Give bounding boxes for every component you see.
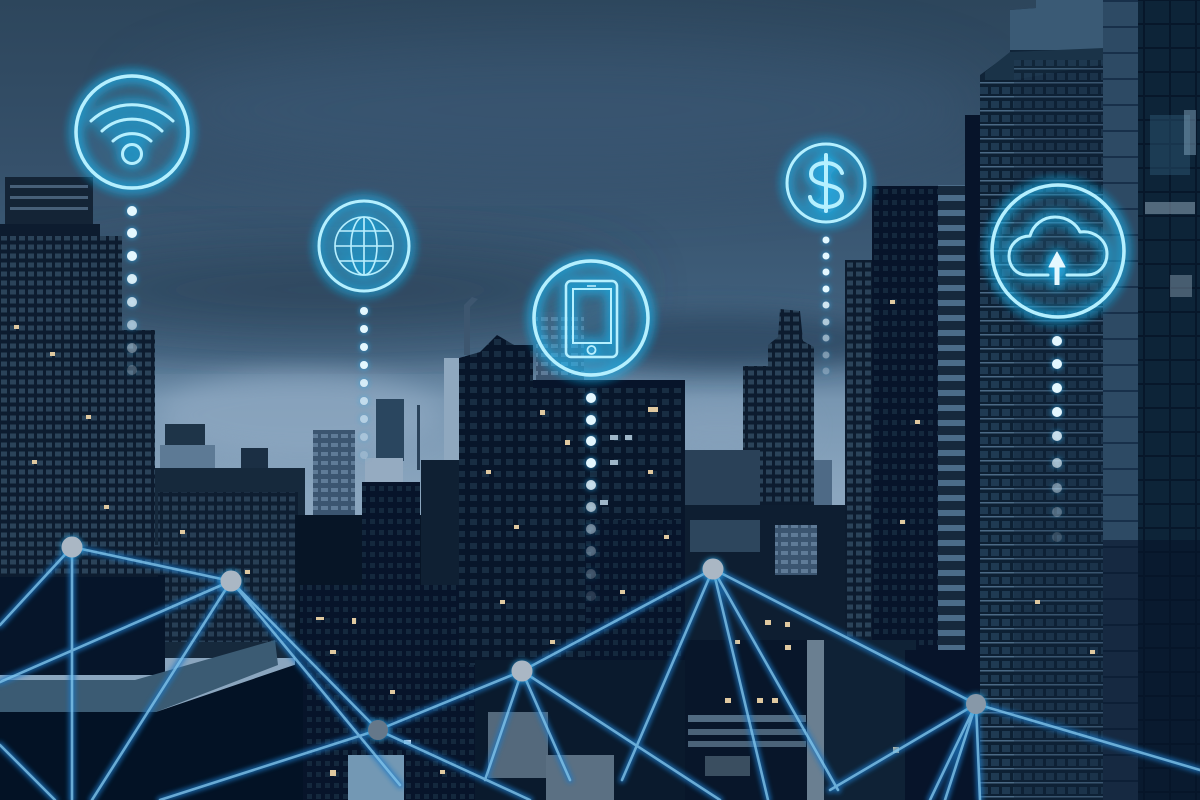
dotted connector: phone — [586, 393, 596, 601]
right towers — [845, 0, 1200, 800]
lit windows — [14, 300, 1095, 776]
foreground rooftops — [0, 545, 980, 800]
mid-rise blocks — [155, 460, 850, 800]
network nodes — [62, 536, 986, 740]
icon: phone — [534, 261, 648, 375]
icon: globe — [319, 201, 409, 291]
network lines — [0, 547, 1200, 800]
central building — [459, 335, 685, 720]
icon: wifi — [76, 76, 188, 188]
dotted connector: dollar — [822, 236, 830, 374]
icon: cloud upload — [992, 185, 1124, 317]
dotted connector: cloud — [1052, 336, 1062, 542]
dotted connector: wifi — [127, 206, 137, 375]
left tower — [0, 177, 155, 606]
icon: dollar — [787, 144, 865, 222]
distant skyline — [160, 297, 832, 525]
dotted connector: globe — [360, 307, 368, 459]
